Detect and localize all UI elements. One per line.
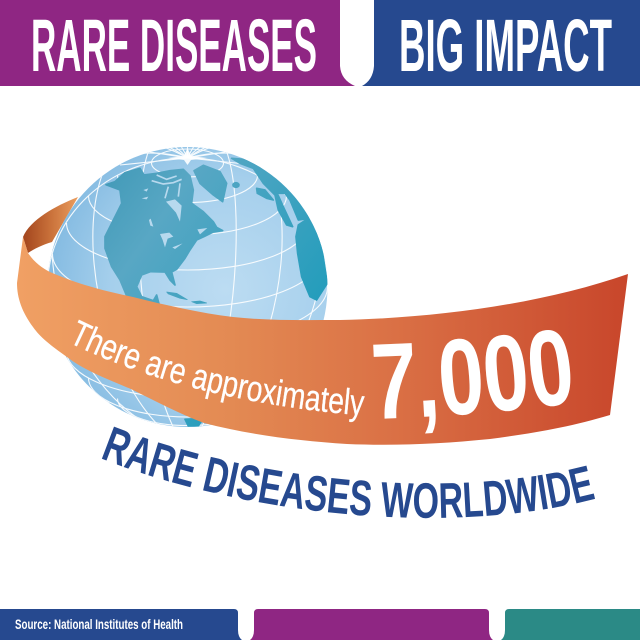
North America — [105, 168, 223, 307]
Caribbean islands — [167, 292, 207, 304]
footer band: purple — [250, 609, 493, 640]
footer band: source — [0, 609, 242, 640]
ribbon text: there are approximately: There are approximately — [74, 320, 365, 422]
globe ocean — [48, 147, 328, 427]
Iceland — [233, 183, 239, 187]
header band: rare diseases: RARE DISEASES — [31, 4, 317, 87]
ribbon back fold — [23, 197, 78, 253]
Africa — [296, 218, 327, 300]
South America tip — [185, 418, 203, 426]
Europe and Asia — [232, 158, 310, 227]
globe continents — [105, 158, 327, 426]
subheading: rare diseases worldwide: RARE DISEASES WORLDWIDE — [102, 426, 595, 518]
north pole highlight — [168, 148, 207, 165]
ribbon number: 7,000: 7,000 — [373, 330, 570, 434]
footer band: teal — [501, 609, 640, 640]
header band: rare diseases — [0, 0, 355, 87]
British Isles — [257, 188, 273, 200]
Greenland — [194, 165, 227, 202]
ribbon front — [17, 237, 628, 445]
Arctic channels — [152, 175, 182, 198]
header band: big impact — [362, 0, 640, 87]
Hudson Bay and Great Lakes — [142, 188, 207, 249]
source text: Source: National Institutes of Health — [15, 616, 183, 632]
globe graticule — [48, 147, 328, 426]
globe — [48, 147, 328, 427]
